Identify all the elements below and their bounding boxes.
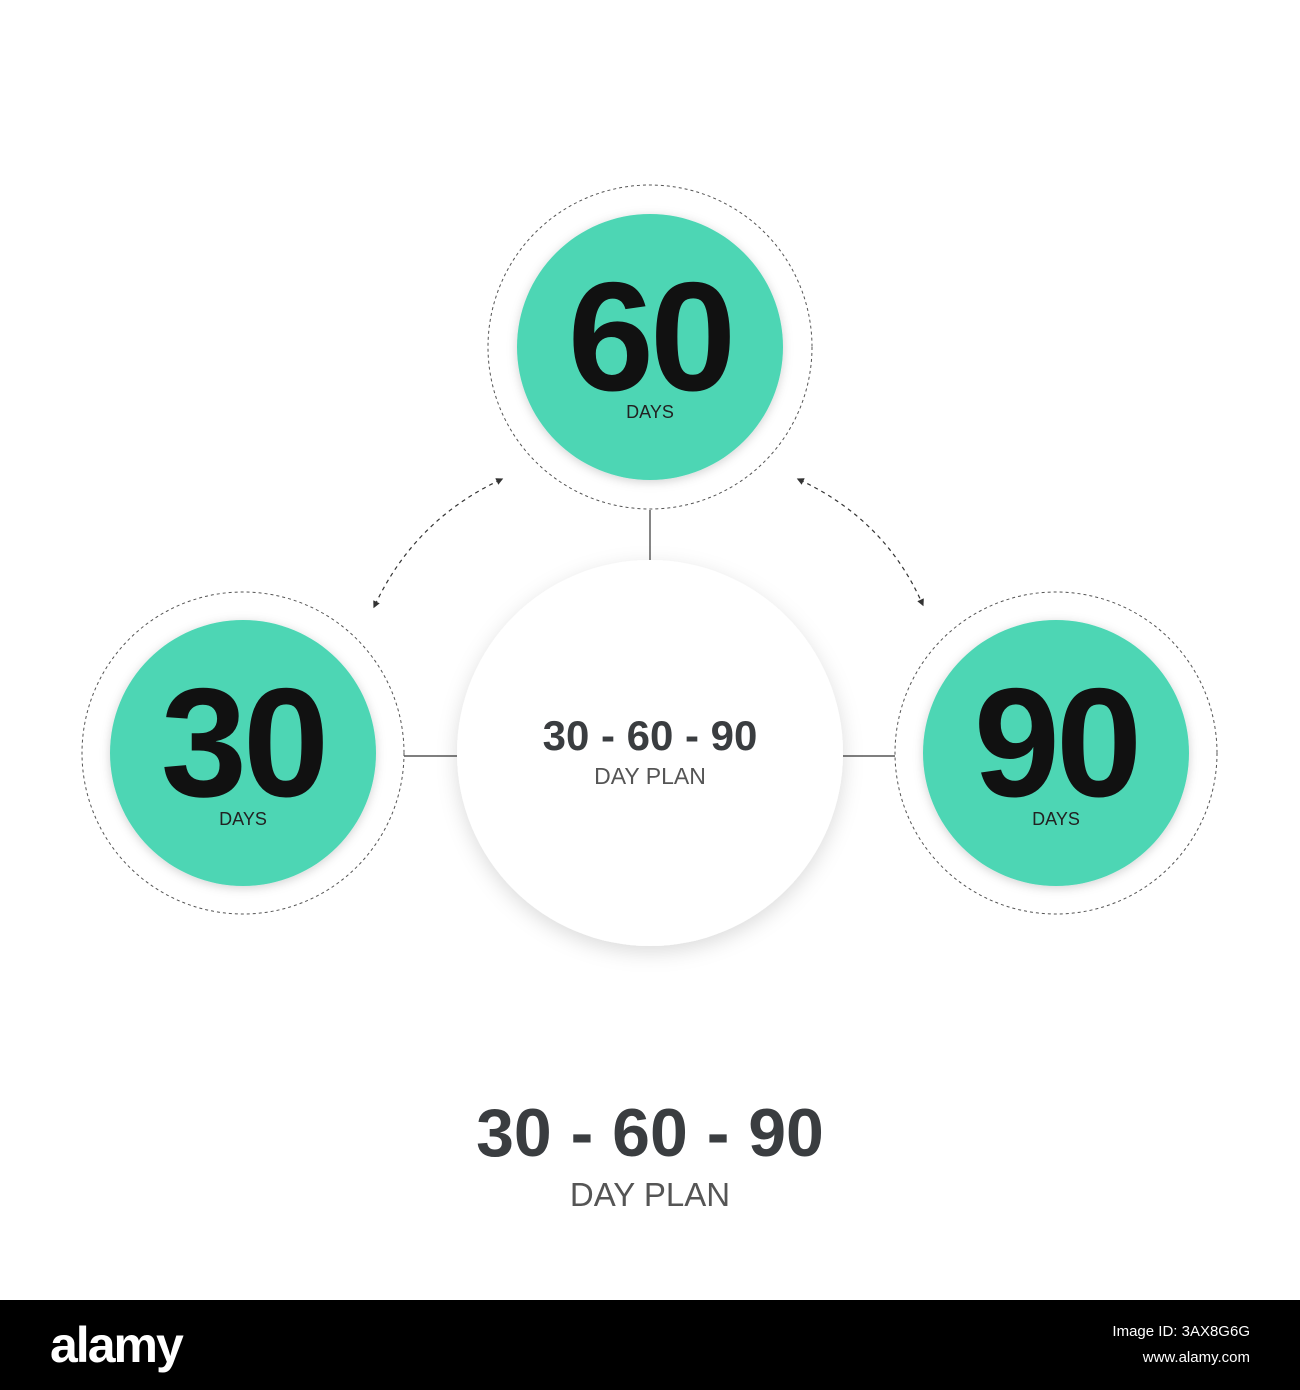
footer bar: alamy bbox=[50, 1317, 184, 1373]
center circle: plan: DAY PLAN bbox=[594, 763, 706, 789]
bottom title: 30 - 60 - 90 bbox=[476, 1095, 824, 1171]
arrow: 60 to 90 bbox=[800, 480, 922, 603]
center circle: plan bbox=[457, 560, 843, 946]
footer bar: Image ID: 3AX8G6G bbox=[1112, 1323, 1250, 1340]
center circle: plan: 30 - 60 - 90 bbox=[543, 712, 757, 759]
bottom title: DAY PLAN bbox=[570, 1176, 730, 1213]
circle: 30 days bbox=[82, 592, 404, 914]
circle: 90 days: 90 bbox=[974, 656, 1138, 829]
circle: 60 days: 60 bbox=[568, 250, 732, 423]
circle: 90 days bbox=[895, 592, 1217, 914]
bottom title bbox=[476, 1095, 824, 1213]
footer bar bbox=[0, 1300, 1300, 1390]
circle: 60 days: DAYS bbox=[626, 402, 674, 422]
circle: 90 days: DAYS bbox=[1032, 809, 1080, 829]
footer bar: www.alamy.com bbox=[1142, 1349, 1250, 1366]
circle: 30 days: DAYS bbox=[219, 809, 267, 829]
circle: 60 days bbox=[488, 185, 812, 509]
circle: 30 days: 30 bbox=[161, 656, 325, 829]
connector lines bbox=[404, 510, 895, 756]
arrow: 60 to 30 bbox=[375, 480, 500, 605]
